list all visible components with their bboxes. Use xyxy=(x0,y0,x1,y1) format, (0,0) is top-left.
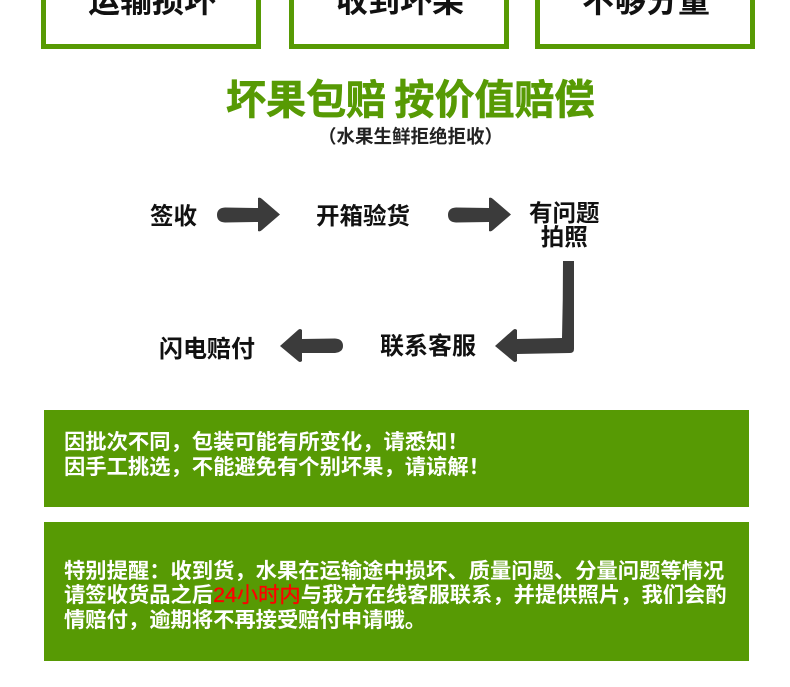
subtitle: （水果生鲜拒绝拒收） xyxy=(318,126,503,146)
reminder text xyxy=(64,558,727,632)
step: sign for delivery: 签收 xyxy=(150,203,197,229)
step: photograph problems: 拍照 xyxy=(541,224,588,250)
notice text: 因手工挑选，不能避免有个别坏果，请谅解！ xyxy=(64,454,490,478)
step: open and inspect: 开箱验货 xyxy=(316,203,410,229)
step: compensation: 闪电赔付 xyxy=(159,336,255,363)
reminder text: 请签收货品之后24小时内与我方在线客服联系，并提供照片，我们会酌 xyxy=(64,583,727,607)
panel: special reminder xyxy=(44,522,749,661)
notice text xyxy=(64,430,490,478)
box: received bad fruit xyxy=(289,0,509,48)
title: 坏果包赔 按价值赔偿 xyxy=(226,77,595,123)
reminder text: 特别提醒：收到货，水果在运输途中损坏、质量问题、分量问题等情况 xyxy=(64,558,724,582)
panel: packaging notice xyxy=(44,410,749,507)
box: short weight xyxy=(535,0,755,48)
notice text: 因批次不同，包装可能有所变化，请悉知！ xyxy=(64,430,469,454)
reminder text: 情赔付，逾期将不再接受赔付申请哦。 xyxy=(64,608,426,632)
step: photograph problems xyxy=(529,200,600,250)
step: contact customer service: 联系客服 xyxy=(380,333,476,360)
step: photograph problems: 有问题 xyxy=(529,200,600,226)
box: transit damage xyxy=(41,0,261,48)
